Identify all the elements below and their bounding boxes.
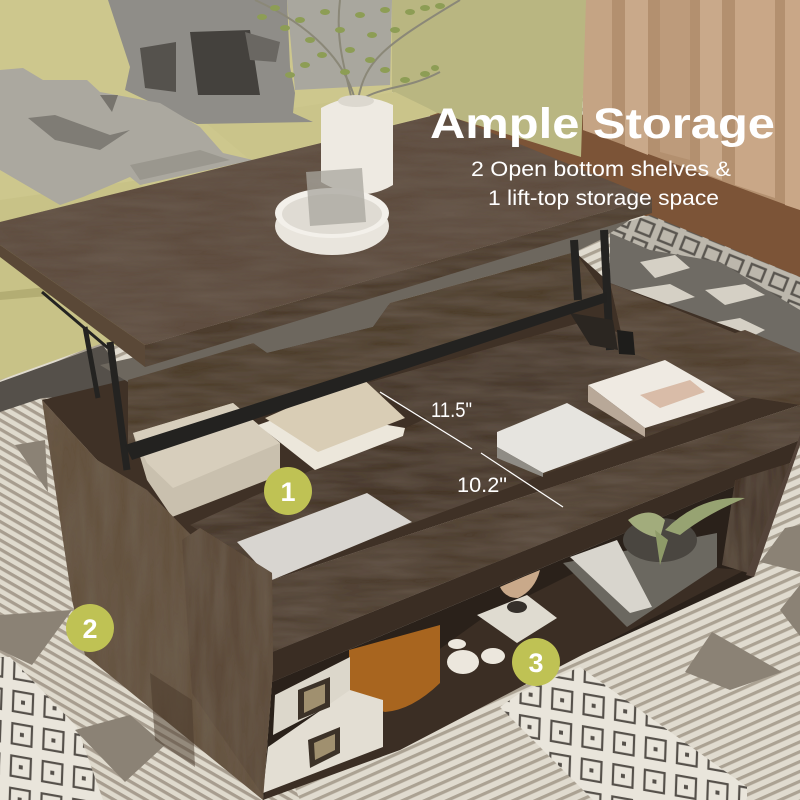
subtitle: 2 Open bottom shelves &	[471, 158, 731, 181]
dimension: 10.2 inches: 10.2"	[457, 474, 507, 497]
marker 3: 3	[528, 648, 544, 678]
marker 2	[66, 604, 114, 652]
white boxes with handles	[263, 657, 383, 793]
crossbar	[125, 292, 607, 460]
dimension: 11.5 inches	[380, 392, 472, 449]
wood floor	[430, 90, 800, 280]
right wall	[610, 283, 800, 405]
rug seen under the raised top	[100, 205, 652, 382]
books right	[497, 360, 735, 477]
lift mechanism	[42, 230, 635, 470]
back wall	[128, 252, 607, 445]
marker 1	[264, 467, 312, 515]
rug by the floor	[610, 215, 800, 355]
storage interior	[42, 252, 800, 580]
stacked books	[258, 376, 405, 470]
throw blanket	[0, 68, 253, 205]
dimension: 10.2 inches	[457, 453, 563, 507]
basket with books and plant	[563, 498, 745, 627]
pillow right	[287, 0, 392, 90]
raised table top	[0, 113, 652, 367]
title: Ample Storage	[430, 100, 775, 148]
plant	[255, 0, 460, 100]
box in left compartment	[133, 403, 280, 517]
sofa	[0, 0, 586, 412]
curtain slats	[583, 0, 800, 210]
laptop	[237, 493, 412, 580]
subtitle: 1 lift-top storage space	[488, 187, 719, 210]
left side panel	[42, 400, 273, 800]
orange box	[349, 625, 440, 712]
tray and glass	[275, 168, 389, 255]
subtitle	[471, 158, 731, 210]
marker 3	[512, 638, 560, 686]
front panel	[272, 405, 800, 682]
lower shelf	[263, 435, 800, 800]
marker 1: 1	[280, 477, 296, 507]
ornament	[477, 570, 557, 643]
vase	[321, 95, 393, 194]
pillow left	[108, 0, 313, 124]
shells	[447, 639, 505, 674]
marker 2: 2	[82, 614, 98, 644]
dimension: 11.5 inches: 11.5"	[431, 399, 472, 422]
